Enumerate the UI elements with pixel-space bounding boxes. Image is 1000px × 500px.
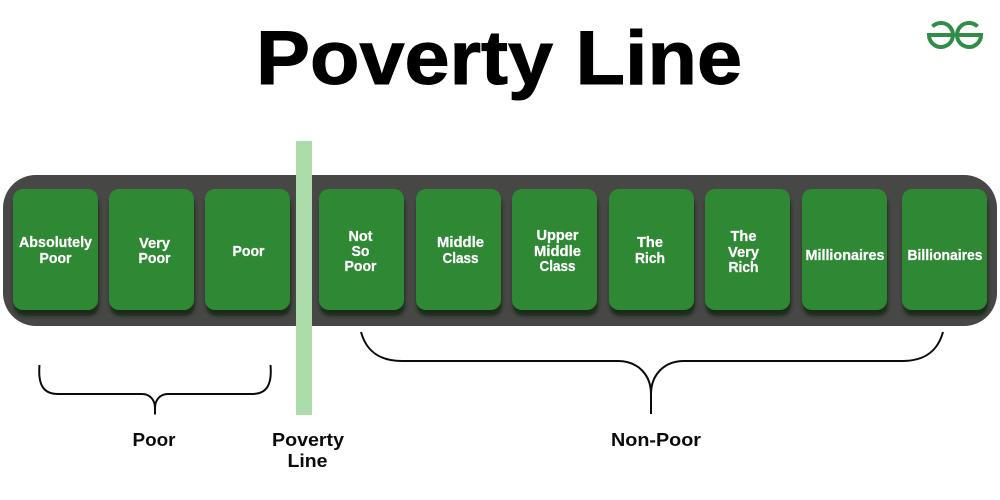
label: Non-Poor: Non-Poor [611, 429, 701, 450]
label: Poverty Line: Line [288, 450, 328, 471]
card: Middle Class: Middle [437, 234, 484, 251]
card: Absolutely Poor: Absolutely [19, 234, 93, 251]
card: Not So Poor: Poor [344, 258, 377, 275]
card: Very Poor: Poor [138, 250, 171, 267]
card: Upper Middle Class: Middle [534, 243, 581, 260]
card: Upper Middle Class: Class [540, 258, 576, 275]
brace: poor [39, 365, 271, 414]
card: Absolutely Poor [13, 189, 99, 316]
panel: income scale [3, 175, 997, 326]
card: Upper Middle Class: Upper [536, 227, 579, 244]
scale background [3, 175, 997, 326]
card: The Rich: Rich [635, 250, 665, 267]
card: Poor [205, 189, 291, 316]
brace: non-poor [361, 332, 943, 414]
poverty line marker [296, 141, 312, 415]
card: Billionaires [902, 189, 988, 316]
icon: logo [929, 23, 981, 47]
label: Poverty Line: Poverty [272, 429, 345, 450]
card: Not So Poor: So [352, 243, 370, 260]
card: Millionaires [802, 189, 888, 316]
card: The Rich [609, 189, 695, 316]
card: The Very Rich [705, 189, 791, 316]
card: Very Poor [109, 189, 195, 316]
card: Not So Poor [319, 189, 405, 316]
card: Millionaires: Millionaires [806, 247, 884, 264]
card: Poor: Poor [232, 243, 265, 260]
card: Middle Class: Class [442, 250, 478, 267]
card: Not So Poor: Not [348, 228, 372, 245]
label: Poor: Poor [132, 429, 176, 450]
card: Middle Class [416, 189, 502, 316]
card: The Very Rich: The [730, 228, 756, 245]
card: Upper Middle Class [512, 189, 598, 316]
title: Poverty Line [256, 16, 742, 101]
card: Very Poor: Very [139, 235, 171, 252]
card: Absolutely Poor: Poor [40, 250, 72, 267]
card: The Very Rich: Very [728, 244, 760, 261]
card: The Rich: The [637, 234, 663, 251]
card: The Very Rich: Rich [728, 259, 758, 276]
card: Billionaires: Billionaires [908, 247, 982, 264]
